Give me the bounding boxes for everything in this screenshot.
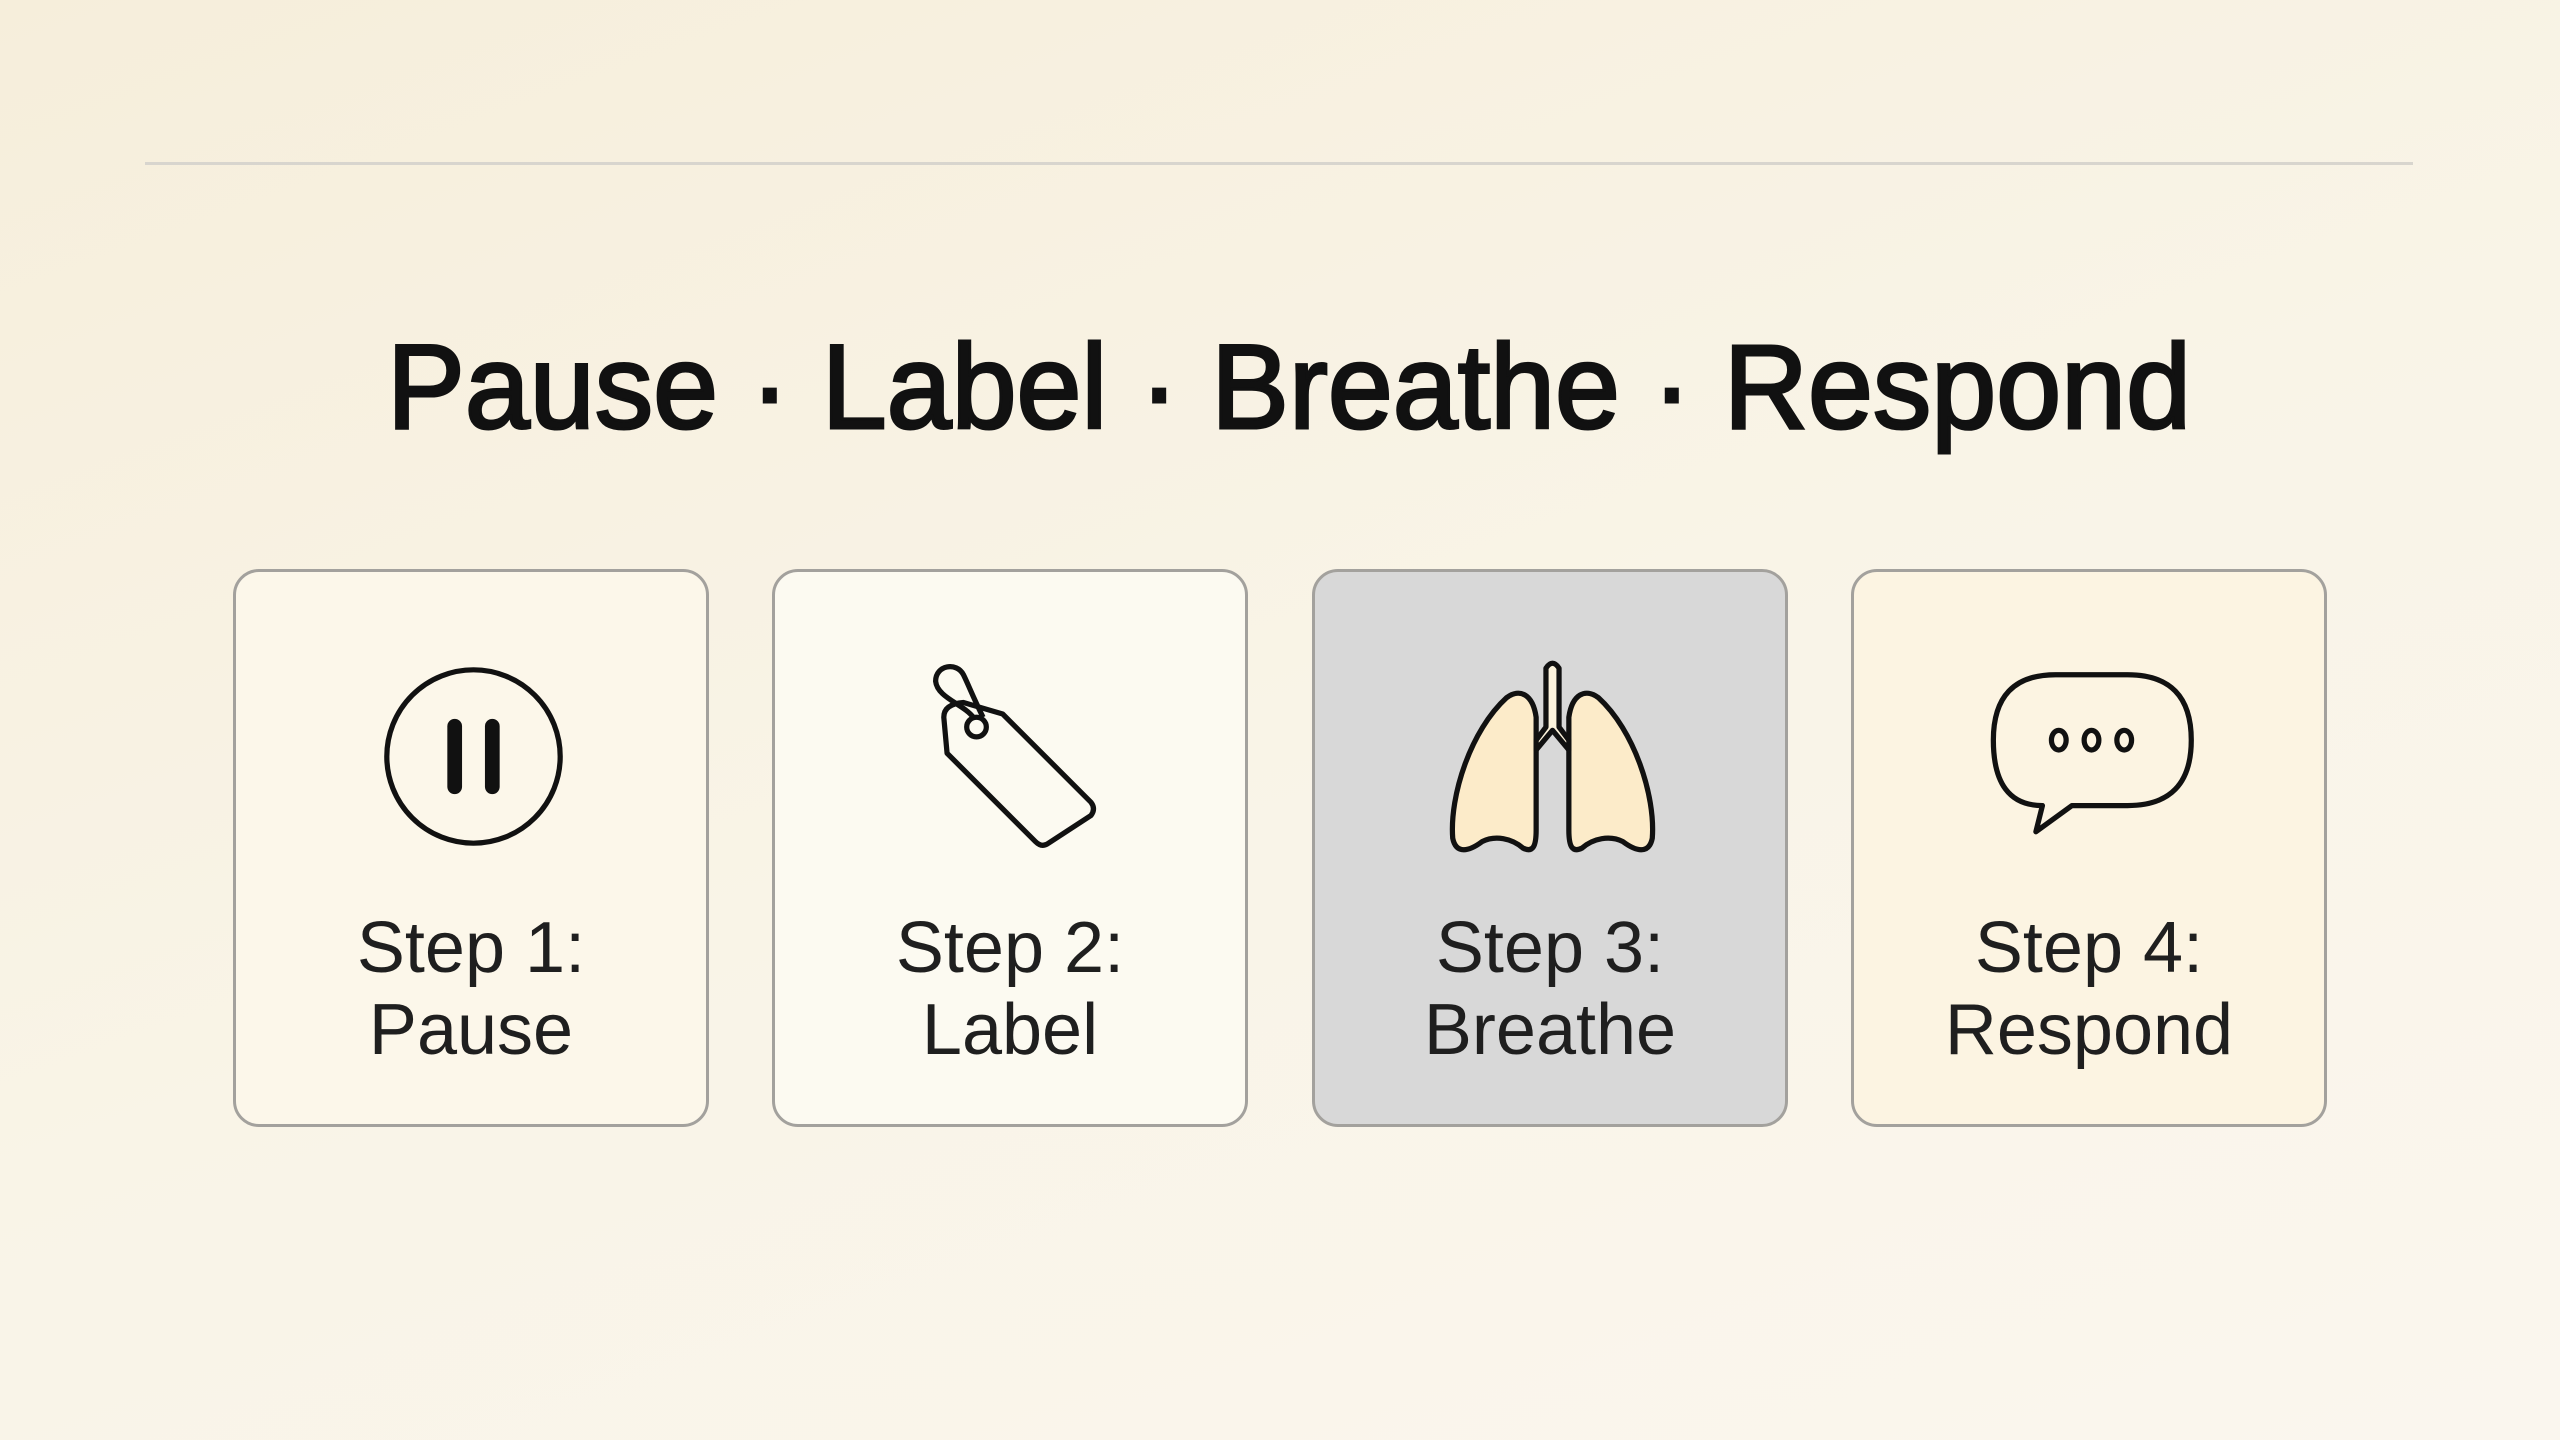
label: Respond [1945,990,2233,1070]
card: step 3 breathe [1312,569,1788,1127]
icon: speech bubble [1990,672,2194,834]
label: Label [922,990,1098,1070]
card: step 2 label [772,569,1248,1127]
label: Step 4: [1975,908,2203,988]
label [896,908,1124,1070]
label [1424,908,1676,1070]
title: Pause · Label · Breathe · Respond [387,320,2191,454]
icon: lungs [1450,660,1656,852]
card: step 1 pause [233,569,709,1127]
label: Breathe [1424,990,1676,1070]
icon: tag [933,664,1096,848]
card: step 4 respond [1851,569,2327,1127]
label: Step 2: [896,908,1124,988]
label [1945,908,2233,1070]
label: Pause [369,990,573,1070]
label: Step 1: [357,908,585,988]
label: Step 3: [1436,908,1664,988]
label [357,908,585,1070]
icon: pause [384,667,563,846]
